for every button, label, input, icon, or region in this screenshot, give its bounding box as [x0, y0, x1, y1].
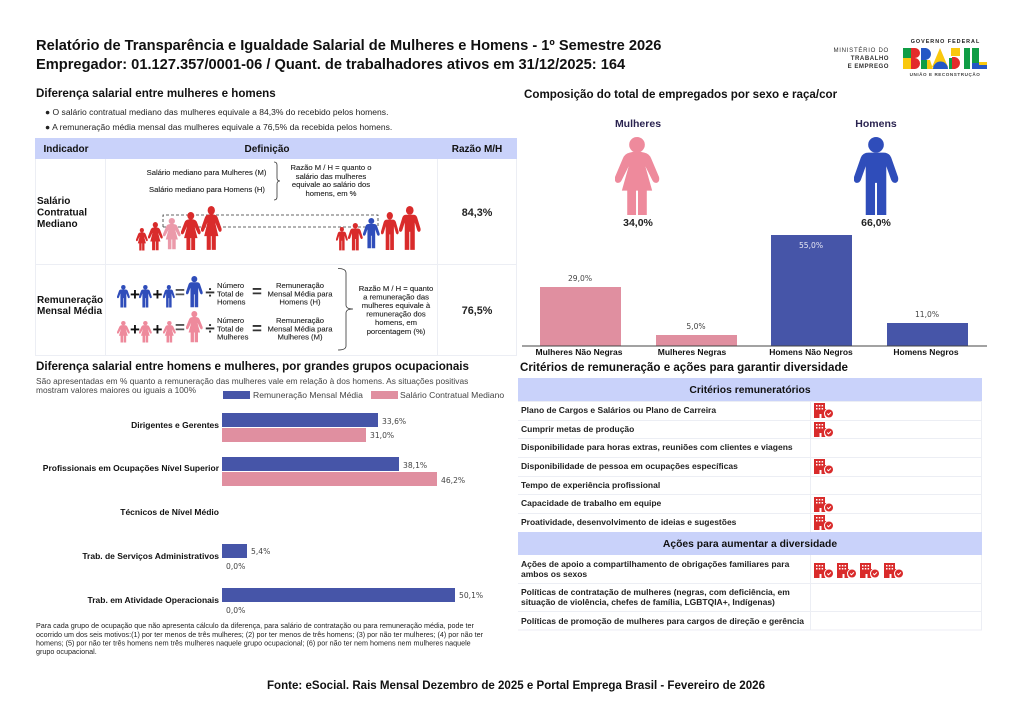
bar chart: grupos ocupacionais: Dirigentes e Gerentes	[131, 420, 219, 430]
row: remuneração mensal média: homens, em	[375, 318, 417, 327]
row: remuneração mensal média: Número	[217, 316, 244, 325]
row: remuneração mensal média: Remuneração	[276, 281, 324, 290]
bar chart: grupos ocupacionais: Técnicos de Nível Médio	[120, 507, 219, 517]
bar chart: grupos ocupacionais	[43, 413, 483, 615]
icon: mulheres 34,0%: 34,0%	[623, 217, 654, 229]
rows	[521, 559, 804, 626]
row: remuneração mensal média: Homens (H)	[279, 298, 321, 306]
row: remuneração mensal média: Mensal Média	[37, 306, 102, 317]
row: salário contratual mediano: Salário mediano para Homens (H)	[149, 185, 265, 194]
bar chart: grupos ocupacionais: Profissionais em Ocupações Nível Superior	[43, 463, 220, 473]
row: remuneração mensal média: Mulheres (M)	[277, 332, 323, 342]
operators: +	[153, 285, 163, 304]
row: remuneração mensal média: Total de	[217, 290, 244, 298]
rows: Disponibilidade para horas extras, reuniões com clientes e viagens	[521, 442, 793, 452]
legend: Salário Contratual Mediano	[400, 390, 504, 400]
row: salário contratual mediano	[37, 162, 493, 250]
table header: Indicador	[43, 144, 89, 155]
bar chart: grupos ocupacionais: 38,1%	[403, 461, 427, 470]
rows: Políticas de promoção de mulheres para cargos de direção e gerência	[521, 616, 804, 626]
row: remuneração mensal média: Número	[217, 281, 244, 290]
heading: composição: Composição do total de empregados por sexo e raça/cor	[524, 88, 838, 101]
bar chart: composição: 29,0%	[568, 274, 592, 283]
text block: nota de rodapé: grupo ocupacional.	[36, 647, 97, 656]
icons: empresa	[814, 563, 903, 578]
text block: bullets: ● O salário contratual mediano das mulheres equivale a 84,3% do recebido pelos homens.	[45, 107, 388, 117]
operators: +	[130, 320, 140, 339]
title: Relatório de Transparência e Igualdade Salarial de Mulheres e Homens - 1º Semestre 2026	[36, 38, 661, 54]
bar chart: grupos ocupacionais: 33,6%	[382, 417, 406, 426]
rows: situação de violência, chefes de família, LGBTQIA+, Indígenas)	[521, 597, 775, 607]
logo: Ministério do Trabalho e Emprego: TRABALHO	[851, 55, 889, 62]
row: salário contratual mediano: salário das mulheres	[296, 172, 366, 181]
title	[36, 38, 661, 73]
panel: indicator table	[35, 138, 517, 356]
bar chart: grupos ocupacionais: Trab. de Serviços Administrativos	[82, 551, 219, 561]
logo: Ministério do Trabalho e Emprego: E EMPREGO	[848, 63, 889, 70]
rows: ambos os sexos	[521, 569, 587, 579]
value 84,3%: 84,3%	[462, 207, 493, 219]
icon: mulheres 34,0%: Mulheres	[615, 118, 661, 130]
icon: homens 66,0%: Homens	[855, 118, 897, 130]
icons: fórmula homens	[117, 276, 203, 307]
row: remuneração mensal média	[37, 268, 493, 350]
panel: ações para aumentar a diversidade: Ações para aumentar a diversidade	[663, 539, 837, 550]
logo: Governo Federal Brasil: GOVERNO FEDERAL	[911, 39, 980, 45]
legend	[223, 390, 504, 400]
panel: ações para aumentar a diversidade	[518, 532, 982, 630]
text block: nota de rodapé: ocorrido um dos seis motivos:(1) por ter menos de três mulheres; (2) por ter menos de três homens; (3) por não ter mulheres; (4) por não ter	[36, 630, 484, 639]
row: remuneração mensal média: Razão M / H = quanto	[359, 284, 433, 293]
bar chart: grupos ocupacionais: 5,4%	[251, 547, 270, 556]
text block: explicação	[36, 376, 468, 395]
row: remuneração mensal média: Mensal Média para	[268, 324, 333, 334]
row: remuneração mensal média: Homens	[217, 298, 246, 306]
footer source: Fonte: eSocial. Rais Mensal Dezembro de 2025 e Portal Emprega Brasil - Fevereiro de 2026	[267, 680, 765, 692]
row: remuneração mensal média: Remuneração	[37, 295, 103, 306]
table header: Definição	[244, 144, 290, 155]
table header	[43, 144, 502, 155]
text block: nota de rodapé: homens; (5) por não ter três homens nem três mulheres naquele grupo ocupacional; (6) por não ter nem homens nem mulheres naquele	[36, 638, 471, 648]
operators	[130, 282, 262, 339]
row: remuneração mensal média: a remuneração das	[363, 292, 429, 302]
text block: bullets	[45, 107, 392, 132]
bar chart: composição: 11,0%	[915, 310, 939, 319]
heading: diferença salarial: Diferença salarial entre mulheres e homens	[36, 87, 276, 100]
logo: Ministério do Trabalho e Emprego	[834, 47, 889, 70]
operators: =	[252, 282, 262, 301]
icons: mulheres em escala	[136, 206, 222, 250]
row: remuneração mensal média: remuneração dos	[366, 310, 426, 318]
panel: critérios remuneratórios: Critérios remuneratórios	[689, 385, 811, 396]
icons: homens em escala	[336, 206, 421, 250]
row: salário contratual mediano: equivale ao salário dos	[292, 180, 370, 189]
logo: Governo Federal Brasil	[903, 39, 987, 77]
rows: Capacidade de trabalho em equipe	[521, 498, 662, 508]
rows: Disponibilidade de pessoa em ocupações específicas	[521, 461, 738, 471]
logo: Governo Federal Brasil: UNIÃO E RECONSTRUÇÃO	[910, 71, 980, 77]
rows: Plano de Cargos e Salários ou Plano de Carreira	[521, 405, 716, 415]
rows: Cumprir metas de produção	[521, 424, 634, 434]
operators: =	[252, 319, 262, 338]
bar chart: grupos ocupacionais: 50,1%	[459, 591, 483, 600]
row: salário contratual mediano: Contratual	[37, 208, 87, 218]
row: salário contratual mediano: Mediano	[37, 219, 78, 230]
icons: fórmula mulheres	[117, 311, 203, 342]
heading: critérios: Critérios de remuneração e ações para garantir diversidade	[520, 361, 849, 374]
heading: grupos ocupacionais: Diferença salarial entre homens e mulheres, por grandes grupos ocupacionais	[36, 360, 469, 373]
bar chart: grupos ocupacionais: 0,0%	[226, 562, 245, 571]
row: remuneração mensal média: porcentagem (%)	[367, 327, 426, 336]
icons: empresa	[814, 403, 833, 530]
operators: +	[153, 320, 163, 339]
icon: homens 66,0%	[854, 118, 898, 229]
value 76,5%: 76,5%	[462, 305, 493, 317]
row: remuneração mensal média: Mulheres	[217, 332, 249, 342]
bar chart: composição: Homens Negros	[893, 347, 959, 357]
bar chart: composição: 5,0%	[686, 322, 706, 331]
icon: homens 66,0%: 66,0%	[861, 217, 892, 229]
icon: mulheres 34,0%	[615, 118, 661, 229]
rows: Proatividade, desenvolvimento de ideias e sugestões	[521, 517, 737, 527]
panel: critérios remuneratórios	[518, 378, 982, 532]
row: remuneração mensal média: mulheres equivale à	[362, 301, 431, 310]
rows: Políticas de contratação de mulheres (negras, com deficiência, em	[521, 587, 790, 597]
row: remuneração mensal média: Total de	[217, 324, 244, 334]
operators: +	[130, 285, 140, 304]
logo: Ministério do Trabalho e Emprego: MINISTÉRIO DO	[834, 47, 889, 54]
operators: =	[175, 283, 185, 302]
title: Empregador: 01.127.357/0001-06 / Quant. de trabalhadores ativos em 31/12/2025: 164	[36, 57, 626, 73]
bar chart: grupos ocupacionais: Trab. em Atividade Operacionais	[88, 595, 219, 605]
text block: bullets: ● A remuneração média mensal das mulheres equivale a 76,5% da recebida pelos homens.	[45, 122, 392, 132]
bar chart: composição: Homens Não Negros	[769, 347, 853, 357]
row: remuneração mensal média: Mensal Média para	[268, 290, 333, 298]
text block: nota de rodapé: Para cada grupo de ocupação que não apresenta cálculo da diferença, para salário de contratação ou para remuneração média, pode ter	[36, 621, 475, 630]
bar chart: composição	[522, 235, 987, 357]
bar chart: composição: 55,0%	[799, 241, 823, 250]
legend: Remuneração Mensal Média	[253, 390, 363, 400]
rows	[521, 405, 793, 527]
table header: Razão M/H	[452, 144, 502, 155]
bar chart: grupos ocupacionais: 0,0%	[226, 606, 245, 615]
row: salário contratual mediano: Salário	[37, 196, 70, 207]
text block: nota de rodapé	[36, 621, 484, 656]
rows: Ações de apoio a compartilhamento de obrigações familiares para	[521, 559, 790, 569]
row: salário contratual mediano: homens, em %	[306, 189, 357, 198]
row: salário contratual mediano: Razão M / H = quanto o	[291, 163, 371, 172]
row: remuneração mensal média: Remuneração	[276, 316, 324, 325]
bar chart: composição: Mulheres Não Negras	[536, 347, 623, 357]
bar chart: grupos ocupacionais: 31,0%	[370, 431, 394, 440]
row: salário contratual mediano: Salário mediano para Mulheres (M)	[147, 168, 267, 177]
bar chart: grupos ocupacionais: 46,2%	[441, 476, 465, 485]
rows: Tempo de experiência profissional	[521, 480, 660, 490]
operators: ÷	[205, 319, 215, 338]
operators: =	[175, 318, 185, 337]
text block: explicação: mostram valores maiores ou iguais a 100%	[36, 385, 197, 395]
text block: explicação: São apresentadas em % quanto a remuneração das mulheres vale em relação à dos homens. As situações positivas	[36, 376, 468, 386]
operators: ÷	[205, 283, 215, 302]
bar chart: composição: Mulheres Negras	[658, 347, 727, 357]
